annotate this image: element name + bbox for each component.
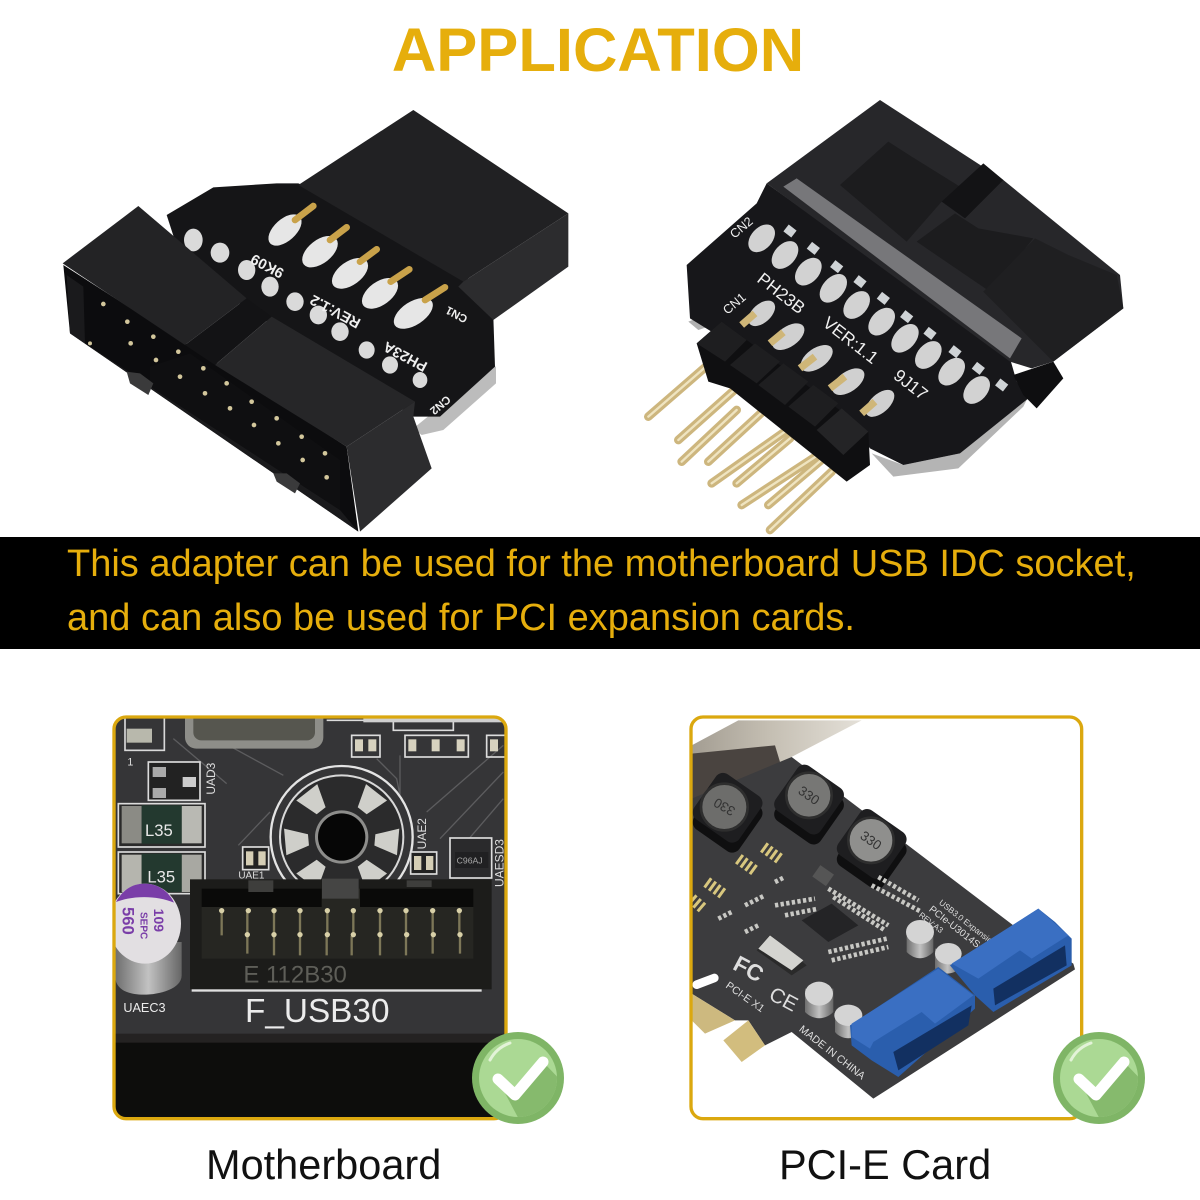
rear socket (767, 100, 1123, 408)
board text: PCI-E X1 (723, 980, 767, 1015)
upper solder row (743, 219, 995, 409)
top small components (327, 717, 507, 757)
gold pins (648, 362, 832, 530)
small caps and IC: C96AJ (457, 856, 483, 866)
purple capacitor (109, 884, 182, 995)
large solder joints (263, 206, 445, 335)
main chip (802, 904, 858, 942)
standoff hole (270, 764, 414, 880)
board markings (248, 250, 470, 416)
purple capacitor: 109 (151, 909, 167, 932)
top left part: 1 (127, 756, 133, 768)
inductors: 330 (711, 795, 738, 819)
metal bracket (692, 720, 862, 805)
banner text: This adapter can be used for the motherboard USB IDC socket, (67, 543, 1136, 585)
icon: green check right (1053, 1032, 1145, 1124)
black description banner (0, 537, 1200, 649)
panel: motherboard photo (109, 705, 507, 1119)
inductors L35: L35 (145, 821, 173, 840)
board text: USB3.0 Expansion (937, 897, 999, 949)
rear socket (298, 110, 568, 320)
inductors: 330 (795, 783, 822, 808)
panel: PCI-E card photo (689, 717, 1082, 1119)
board text: FC (729, 950, 768, 987)
blue USB headers (850, 909, 1072, 1077)
board markings: CN2 (727, 214, 756, 241)
board text: REV:A3 (917, 910, 945, 935)
USB header socket (190, 879, 492, 992)
caption: motherboard: Motherboard (206, 1141, 441, 1188)
board markings: PH23B (754, 268, 809, 318)
board text: MADE IN CHINA (796, 1023, 868, 1083)
inductors (689, 761, 910, 893)
silkscreen labels: F_USB30 (245, 993, 389, 1030)
crystal (185, 718, 324, 749)
board text (723, 897, 999, 1083)
board markings: VER:1.1 (819, 312, 882, 368)
silkscreen labels: UAEC3 (123, 1001, 166, 1015)
small caps and IC: UAESD3 (492, 839, 506, 887)
small caps and IC: UAE1 (238, 871, 265, 882)
banner text: and can also be used for PCI expansion cards. (67, 597, 855, 639)
crystal (757, 935, 807, 975)
purple capacitor: 560 (119, 907, 138, 935)
small caps and IC (238, 818, 506, 887)
banner text (67, 543, 1136, 639)
board markings: CN1 (444, 303, 470, 325)
caption: PCI-E card: PCI-E Card (779, 1141, 991, 1188)
silkscreen labels (124, 998, 388, 1028)
card edge connector (692, 978, 765, 1062)
inductors L35 (118, 804, 205, 894)
board text: PCIe-U3014S+ (926, 904, 987, 954)
board markings: 9K09 (248, 250, 287, 281)
inductors L35: L35 (147, 868, 175, 887)
board markings: CN1 (720, 290, 749, 317)
board text: CE (765, 983, 801, 1017)
UAD3 chip: UAD3 (204, 762, 218, 795)
inductors: 330 (857, 828, 884, 853)
capacitors (805, 920, 962, 1038)
small pads (783, 225, 1008, 391)
board markings: CN2 (427, 393, 452, 416)
UAD3 chip (148, 762, 218, 800)
card PCB (692, 757, 1075, 1099)
board markings: REV:1.2 (308, 291, 364, 331)
pin header (697, 322, 870, 482)
top left part (125, 717, 164, 768)
front socket (63, 206, 432, 532)
left adapter (63, 110, 568, 532)
title: APPLICATION (392, 16, 804, 85)
board markings: 9J17 (890, 365, 932, 404)
small solder joints (184, 229, 427, 388)
board markings (720, 214, 932, 404)
purple capacitor: SEPC (138, 912, 149, 939)
small SMD components (692, 847, 922, 960)
board markings: PH23A (381, 337, 430, 374)
icon: green check left (472, 1032, 564, 1124)
small caps and IC: UAE2 (415, 818, 429, 849)
right adapter (648, 100, 1123, 530)
lower solder row (742, 296, 899, 422)
USB header socket: E 112B30 (243, 962, 347, 989)
